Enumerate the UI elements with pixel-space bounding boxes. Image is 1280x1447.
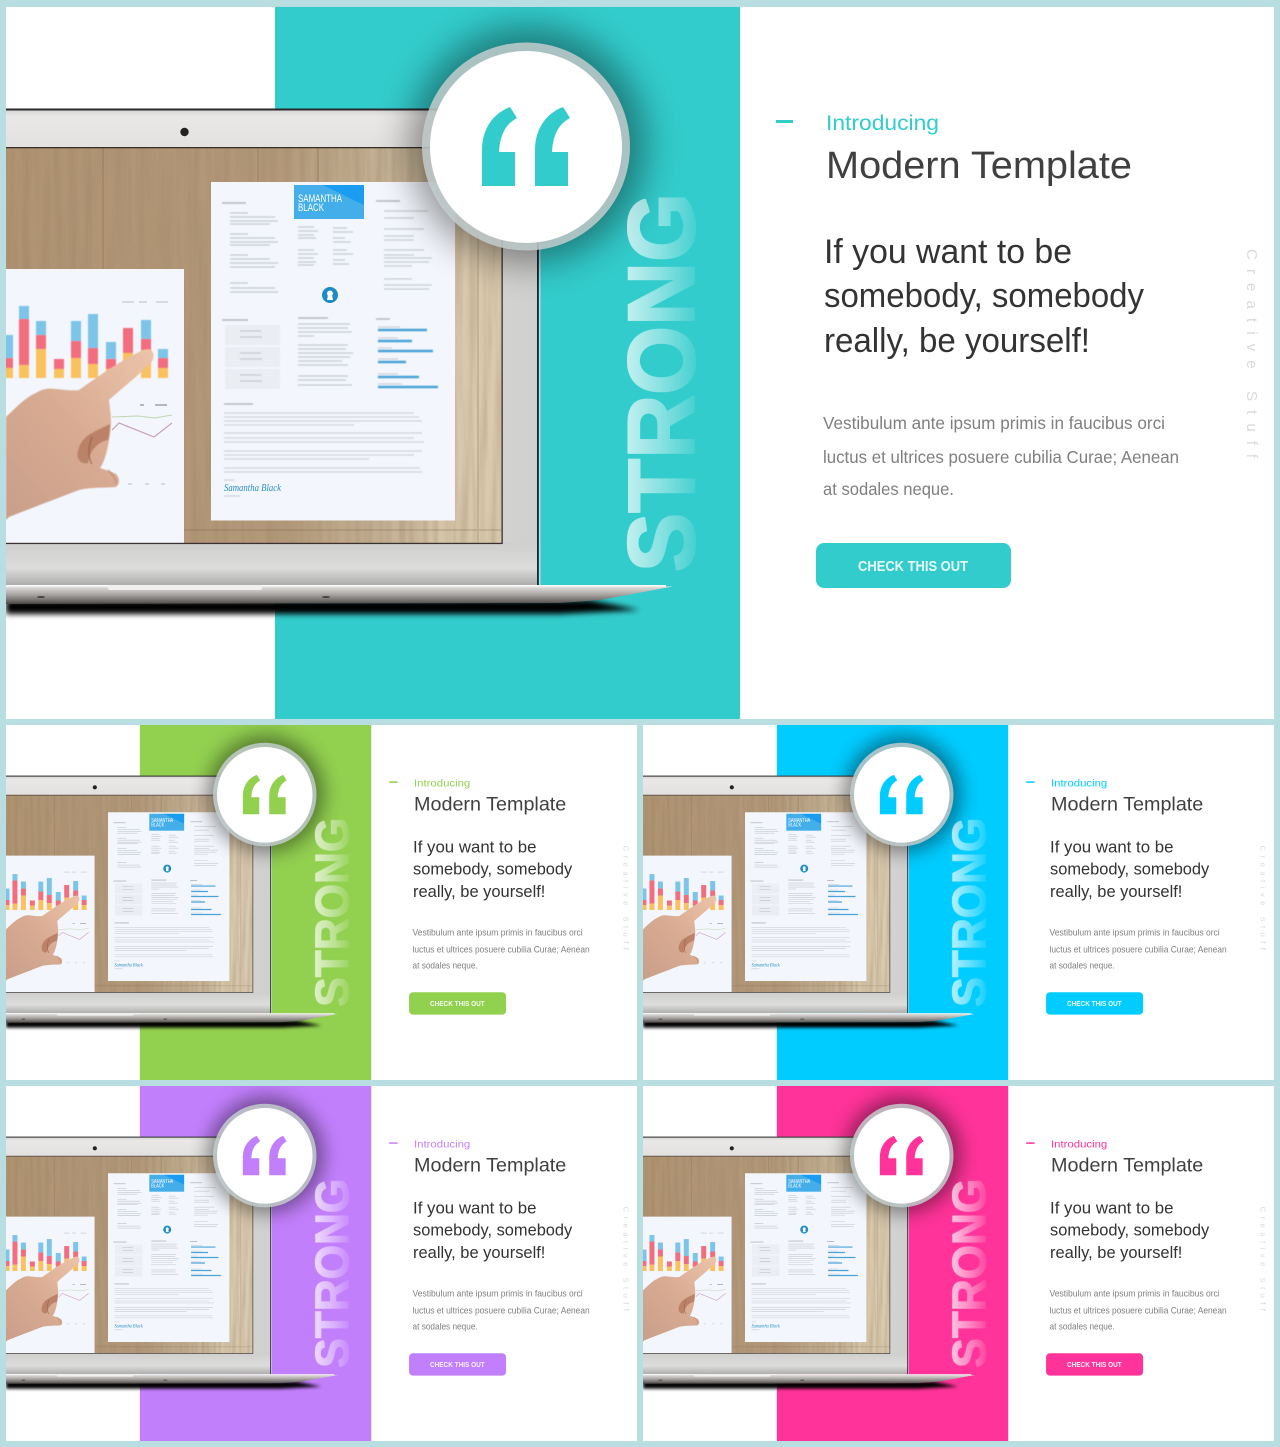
accent dash	[389, 781, 398, 783]
quote circle	[207, 735, 324, 853]
button	[409, 1353, 506, 1376]
laptop mockup	[5, 1137, 338, 1389]
resume header surname: BLACK	[788, 1184, 801, 1190]
button	[816, 543, 1011, 588]
quote text: somebody, somebody	[1050, 1221, 1210, 1240]
body text: at sodales neque.	[1050, 1321, 1115, 1331]
resume signature: Samantha Black	[114, 963, 144, 968]
quote circle	[207, 1096, 324, 1214]
button	[1046, 992, 1143, 1015]
heading: Modern Template	[414, 1155, 566, 1176]
body text: Vestibulum ante ipsum primis in faucibus orci	[413, 927, 583, 937]
icon: quotation marks	[243, 775, 287, 814]
body text: Vestibulum ante ipsum primis in faucibus orci	[1050, 927, 1220, 937]
eyebrow: Introducing	[1051, 778, 1107, 789]
quote text	[1050, 838, 1210, 901]
icon: quotation marks	[880, 775, 924, 814]
button	[1046, 1353, 1143, 1376]
resume header name: SAMANTHA	[788, 1179, 810, 1185]
heading: Modern Template	[1051, 1155, 1203, 1176]
resume header name: SAMANTHA	[151, 1179, 173, 1185]
quote text: somebody, somebody	[824, 277, 1144, 315]
quote text: really, be yourself!	[413, 882, 545, 901]
body text	[413, 1288, 590, 1331]
body text: at sodales neque.	[823, 479, 954, 499]
vertical word STRONG: STRONG	[943, 1179, 996, 1368]
quote text	[413, 838, 573, 901]
slide panel	[643, 1086, 1274, 1441]
quote text: really, be yourself!	[413, 1243, 545, 1262]
quote text: somebody, somebody	[413, 860, 573, 879]
colour band	[140, 1086, 371, 1441]
body text: at sodales neque.	[1050, 960, 1115, 970]
quote text: really, be yourself!	[824, 322, 1090, 360]
colour band	[777, 725, 1008, 1080]
slide panel	[6, 7, 1274, 719]
resume header surname: BLACK	[151, 823, 164, 829]
body text: luctus et ultrices posuere cubilia Curae; Aenean	[1050, 1305, 1227, 1315]
body text	[1050, 927, 1227, 970]
laptop mockup	[5, 776, 338, 1028]
eyebrow: Introducing	[1051, 1139, 1107, 1150]
side label: Creative Stuff	[622, 1207, 631, 1312]
eyebrow: Introducing	[414, 1139, 470, 1150]
quote text	[413, 1199, 573, 1262]
icon: quotation marks	[243, 1136, 287, 1175]
slide: blue	[642, 725, 1274, 1080]
body text: Vestibulum ante ipsum primis in faucibus orci	[823, 413, 1165, 433]
resume signature: Samantha Black	[751, 1324, 781, 1329]
button: CHECK THIS OUT	[430, 999, 485, 1008]
eyebrow: Introducing	[414, 778, 470, 789]
heading: Modern Template	[1051, 794, 1203, 815]
slide panel	[643, 725, 1274, 1080]
quote text: really, be yourself!	[1050, 882, 1182, 901]
side label: Creative Stuff	[1259, 1207, 1268, 1312]
eyebrow: Introducing	[826, 112, 939, 135]
slide panel	[6, 1086, 637, 1441]
side label: Creative Stuff	[1243, 249, 1260, 459]
body text	[823, 413, 1179, 499]
heading: Modern Template	[414, 794, 566, 815]
button: CHECK THIS OUT	[1067, 1360, 1122, 1369]
quote text: If you want to be	[1050, 1199, 1173, 1218]
body text: luctus et ultrices posuere cubilia Curae; Aenean	[1050, 944, 1227, 954]
slide: pink	[642, 1086, 1274, 1441]
accent dash	[776, 120, 793, 123]
heading: Modern Template	[826, 145, 1132, 187]
resume header surname: BLACK	[151, 1184, 164, 1190]
quote text	[1050, 1199, 1210, 1262]
vertical word STRONG: STRONG	[943, 818, 996, 1007]
resume header name: SAMANTHA	[298, 193, 342, 205]
button: CHECK THIS OUT	[430, 1360, 485, 1369]
quote circle	[410, 27, 646, 263]
resume signature: Samantha Black	[114, 1324, 144, 1329]
body text	[413, 927, 590, 970]
quote text: If you want to be	[1050, 838, 1173, 857]
accent dash	[1026, 1142, 1035, 1144]
colour band	[275, 7, 740, 719]
quote text: If you want to be	[413, 838, 536, 857]
slide: green	[5, 725, 637, 1080]
quote text: If you want to be	[413, 1199, 536, 1218]
resume header surname: BLACK	[788, 823, 801, 829]
body text: luctus et ultrices posuere cubilia Curae; Aenean	[823, 447, 1179, 467]
resume signature: Samantha Black	[751, 963, 781, 968]
side label: Creative Stuff	[622, 846, 631, 951]
body text: at sodales neque.	[413, 1321, 478, 1331]
resume header name: SAMANTHA	[151, 818, 173, 824]
quote text: somebody, somebody	[413, 1221, 573, 1240]
accent dash	[1026, 781, 1035, 783]
slide: teal main	[3, 7, 1274, 719]
resume header surname: BLACK	[298, 202, 324, 214]
quote text: really, be yourself!	[1050, 1243, 1182, 1262]
accent dash	[389, 1142, 398, 1144]
button: CHECK THIS OUT	[858, 559, 968, 575]
icon: quotation marks	[482, 107, 570, 186]
body text: luctus et ultrices posuere cubilia Curae; Aenean	[413, 944, 590, 954]
colour band	[777, 1086, 1008, 1441]
quote circle	[844, 1096, 961, 1214]
quote text: If you want to be	[824, 233, 1072, 271]
laptop mockup	[3, 108, 673, 614]
button	[409, 992, 506, 1015]
colour band	[140, 725, 371, 1080]
body text: Vestibulum ante ipsum primis in faucibus orci	[413, 1288, 583, 1298]
body text: at sodales neque.	[413, 960, 478, 970]
laptop mockup	[642, 776, 975, 1028]
vertical word STRONG: STRONG	[306, 1179, 359, 1368]
side label: Creative Stuff	[1259, 846, 1268, 951]
vertical word STRONG: STRONG	[609, 193, 715, 572]
resume signature: Samantha Black	[224, 483, 281, 494]
button: CHECK THIS OUT	[1067, 999, 1122, 1008]
body text: luctus et ultrices posuere cubilia Curae; Aenean	[413, 1305, 590, 1315]
quote text	[824, 233, 1144, 360]
laptop mockup	[642, 1137, 975, 1389]
quote text: somebody, somebody	[1050, 860, 1210, 879]
resume header name: SAMANTHA	[788, 818, 810, 824]
body text: Vestibulum ante ipsum primis in faucibus orci	[1050, 1288, 1220, 1298]
vertical word STRONG: STRONG	[306, 818, 359, 1007]
slide: purple	[5, 1086, 637, 1441]
slide panel	[6, 725, 637, 1080]
icon: quotation marks	[880, 1136, 924, 1175]
body text	[1050, 1288, 1227, 1331]
quote circle	[844, 735, 961, 853]
